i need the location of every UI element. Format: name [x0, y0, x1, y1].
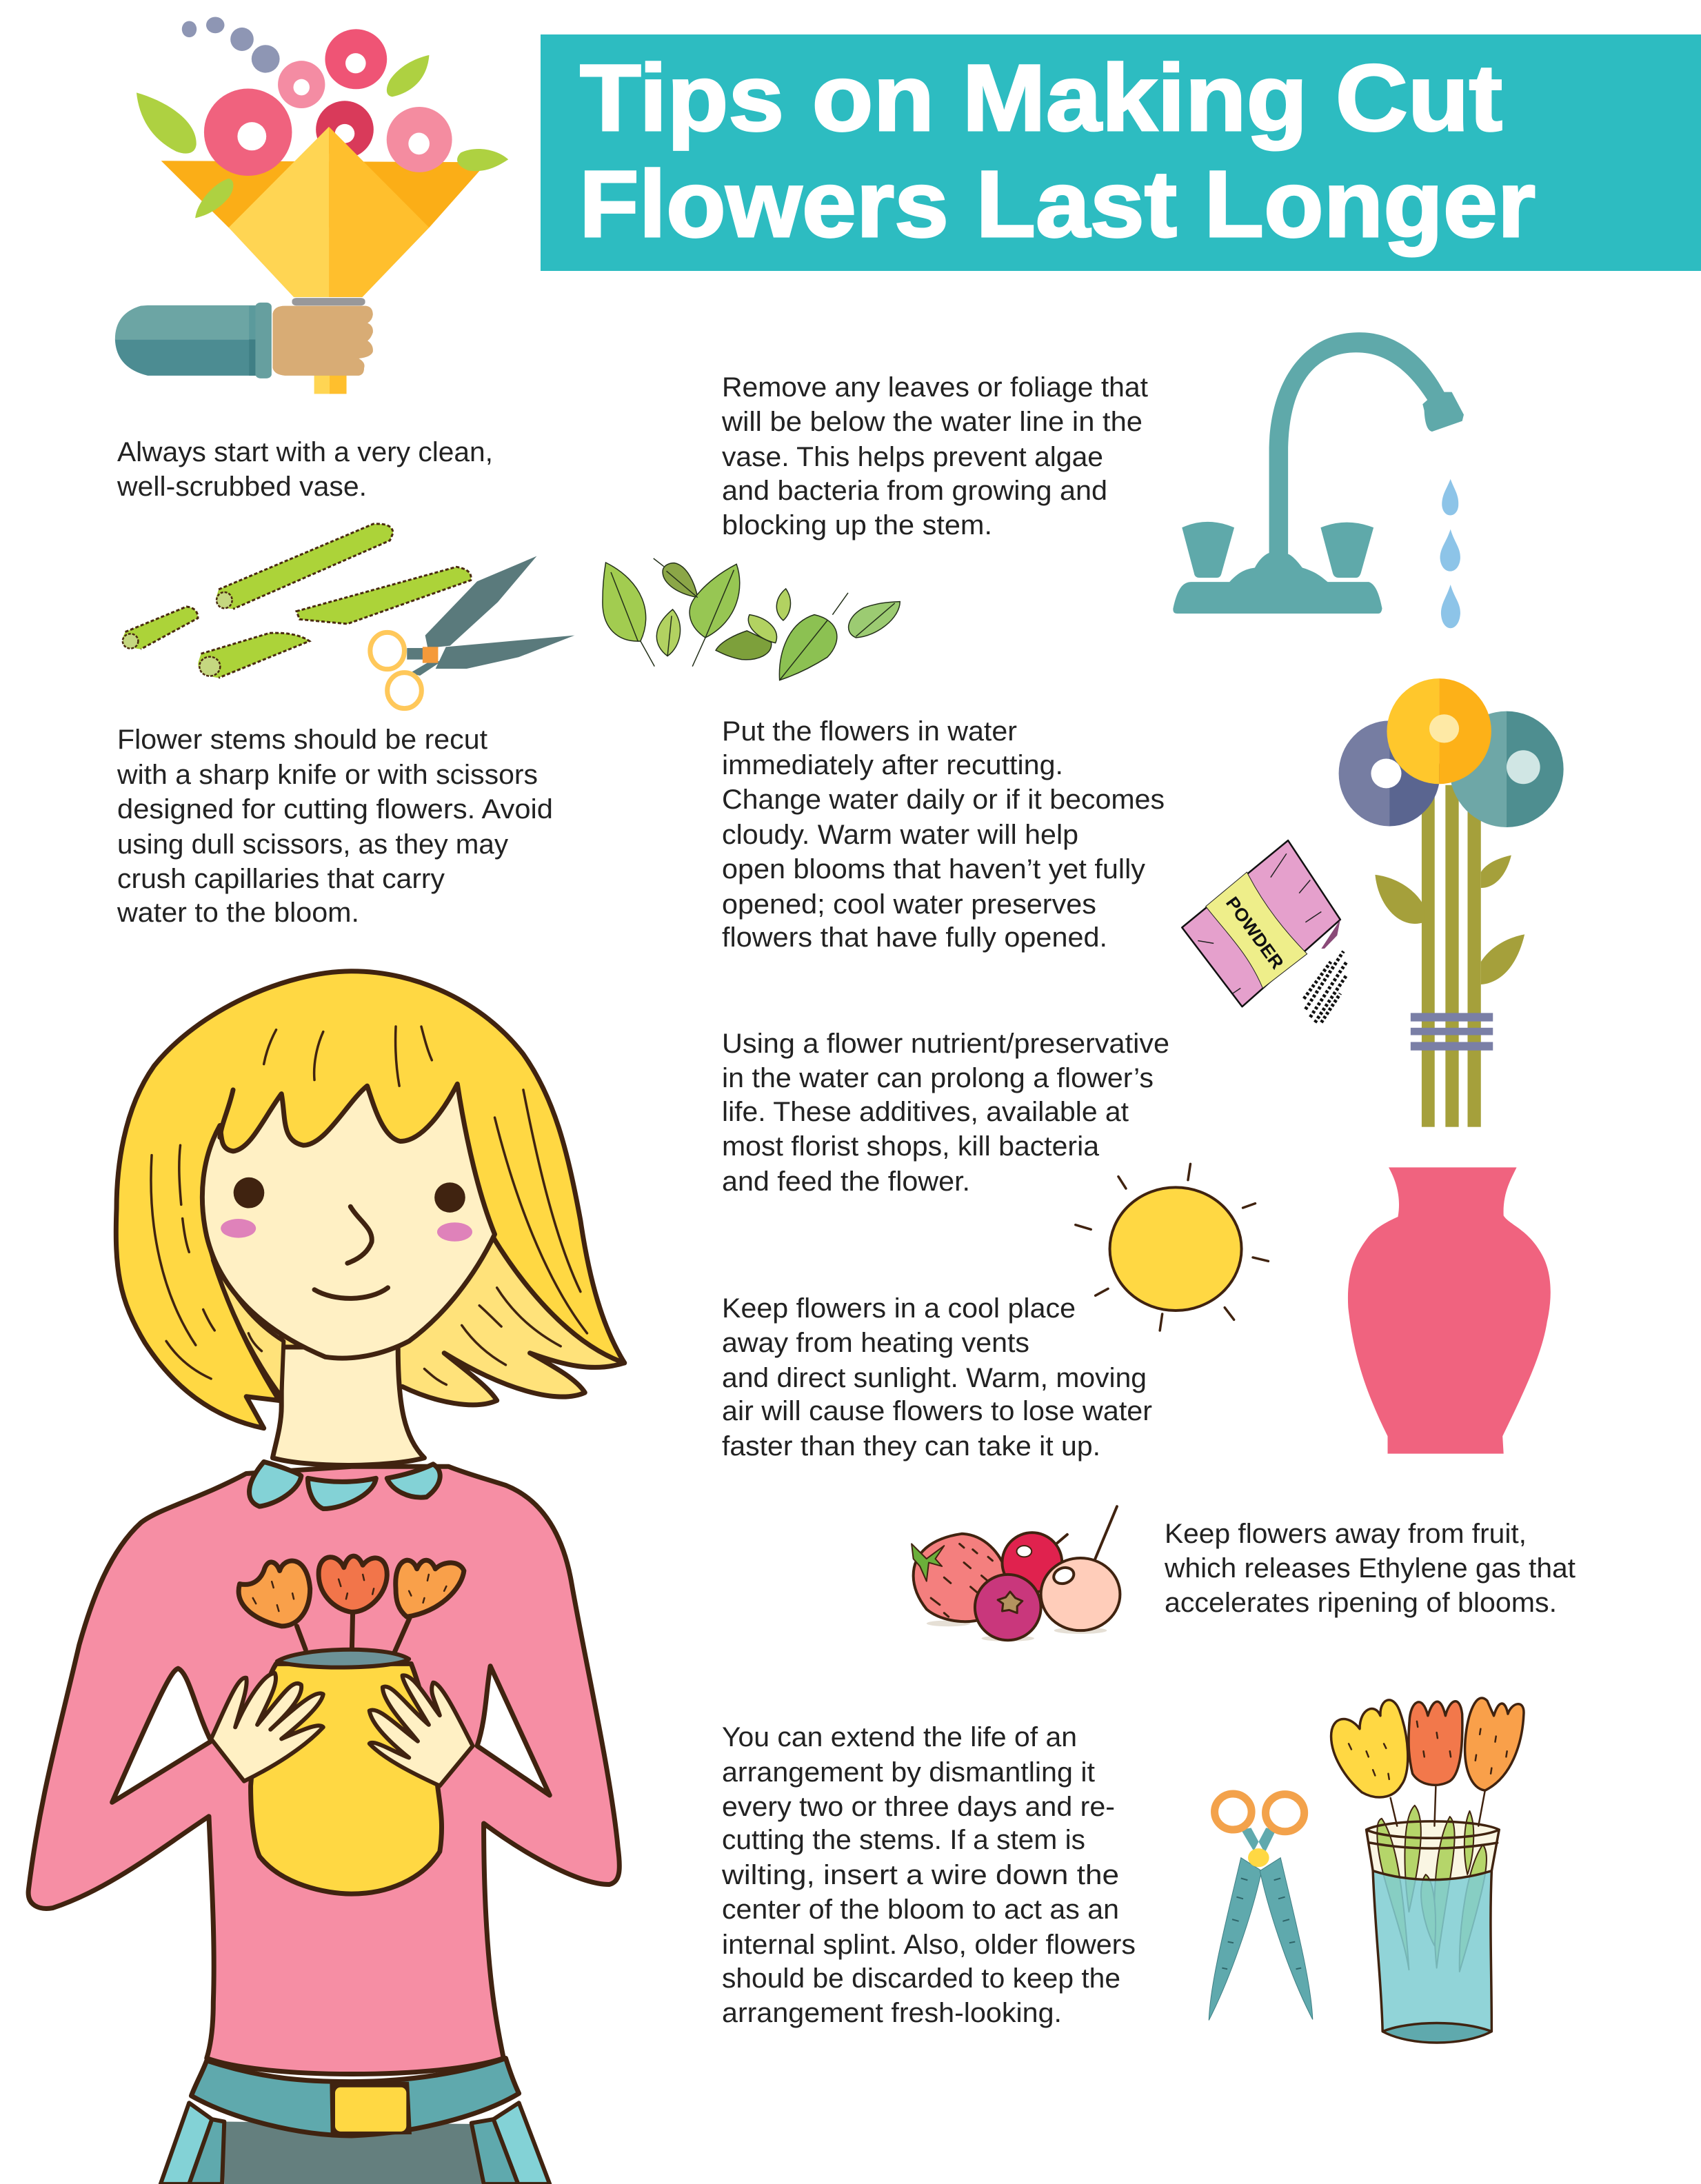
icon: fruit — [912, 1506, 1120, 1641]
text: fruit — [1164, 1519, 1576, 1618]
text: remove foliage: vase. This helps prevent algae — [722, 442, 1103, 472]
text: dismantling arrangement: arrangement by dismantling it — [722, 1757, 1095, 1788]
illustration: girl holding a vase — [28, 971, 625, 2184]
icon: three flowers bouquet — [1339, 678, 1564, 1127]
icon: pink vase — [1348, 1167, 1551, 1454]
text: clean vase — [117, 437, 493, 502]
icon: cut stems and scissors — [123, 524, 574, 709]
title banner: Tips on Making Cut — [580, 46, 1502, 151]
icon: powder packet: POWDER — [1222, 893, 1288, 973]
text: cool place: and direct sunlight. Warm, moving — [722, 1363, 1147, 1393]
icon: teal scissors — [1209, 1794, 1313, 2020]
text: remove foliage: blocking up the stem. — [722, 510, 992, 540]
icon: hand holding bouquet — [115, 17, 508, 394]
text: recut stems: using dull scissors, as they may — [117, 829, 508, 860]
text: nutrient preservative: Using a flower nutrient/preservative — [722, 1029, 1169, 1059]
icon: faucet with drops — [1173, 332, 1464, 628]
text: recut stems: with a sharp knife or with scissors — [117, 760, 538, 790]
text: nutrient preservative: life. These additives, available at — [722, 1097, 1129, 1127]
text: water: immediately after recutting. — [722, 750, 1063, 780]
icon: leaves — [603, 558, 900, 680]
text: dismantling arrangement: You can extend the life of an — [722, 1722, 1077, 1752]
text: water: cloudy. Warm water will help — [722, 820, 1078, 850]
text: clean vase: Always start with a very clean, — [117, 437, 493, 467]
text: nutrient preservative: most florist shops, kill bacteria — [722, 1131, 1100, 1162]
text: nutrient preservative: and feed the flower. — [722, 1166, 970, 1197]
text: dismantling arrangement: cutting the stems. If a stem is — [722, 1825, 1085, 1855]
text: water — [722, 716, 1165, 953]
icon: sun — [1076, 1164, 1268, 1331]
title banner: Flowers Last Longer — [579, 152, 1536, 257]
text: nutrient preservative — [722, 1029, 1169, 1197]
text: recut stems: designed for cutting flowers. Avoid — [117, 794, 553, 825]
title banner — [541, 34, 1701, 271]
text: fruit: accelerates ripening of blooms. — [1165, 1588, 1557, 1618]
text: dismantling arrangement: should be discarded to keep the — [722, 1963, 1120, 1994]
text: cool place: air will cause flowers to lose water — [722, 1396, 1152, 1426]
girl: head and hair — [116, 971, 625, 1465]
text: dismantling arrangement: center of the bloom to act as an — [722, 1894, 1119, 1925]
text: cool place: faster than they can take it up. — [722, 1431, 1100, 1462]
text: water: opened; cool water preserves — [722, 889, 1096, 920]
text: fruit: Keep flowers away from fruit, — [1165, 1519, 1527, 1549]
icon: powder packet — [1182, 840, 1347, 1022]
text: water: Put the flowers in water — [722, 716, 1017, 747]
girl: body and sweater — [28, 1466, 619, 2184]
text: clean vase: well-scrubbed vase. — [117, 472, 367, 502]
text: dismantling arrangement: arrangement fresh-looking. — [722, 1998, 1062, 2028]
text: dismantling arrangement: wilting, insert a wire down the — [721, 1860, 1119, 1890]
text: remove foliage: will be below the water line in the — [721, 407, 1143, 437]
text: water: flowers that have fully opened. — [722, 922, 1107, 953]
text: dismantling arrangement: every two or three days and re- — [722, 1792, 1115, 1822]
text: water: open blooms that haven’t yet fully — [722, 854, 1145, 884]
text: water: Change water daily or if it becomes — [722, 785, 1165, 815]
text: remove foliage — [721, 372, 1148, 540]
text: cool place — [722, 1293, 1152, 1462]
text: remove foliage: and bacteria from growing and — [722, 476, 1107, 506]
text: recut stems: water to the bloom. — [117, 898, 359, 928]
text: cool place: away from heating vents — [722, 1328, 1029, 1358]
text: dismantling arrangement: internal splint. Also, older flowers — [722, 1930, 1136, 1960]
text: remove foliage: Remove any leaves or foliage that — [722, 372, 1148, 403]
text: dismantling arrangement — [721, 1722, 1136, 2028]
girl: collar — [250, 1462, 440, 1509]
text: recut stems: crush capillaries that carry — [117, 864, 445, 894]
text: recut stems: Flower stems should be recut — [117, 725, 487, 755]
icon: tulips in glass vase — [1331, 1698, 1524, 2043]
text: recut stems — [117, 725, 553, 928]
text: fruit: which releases Ethylene gas that — [1164, 1553, 1576, 1584]
text: nutrient preservative: in the water can prolong a flower’s — [722, 1063, 1154, 1093]
text: cool place: Keep flowers in a cool place — [722, 1293, 1076, 1324]
